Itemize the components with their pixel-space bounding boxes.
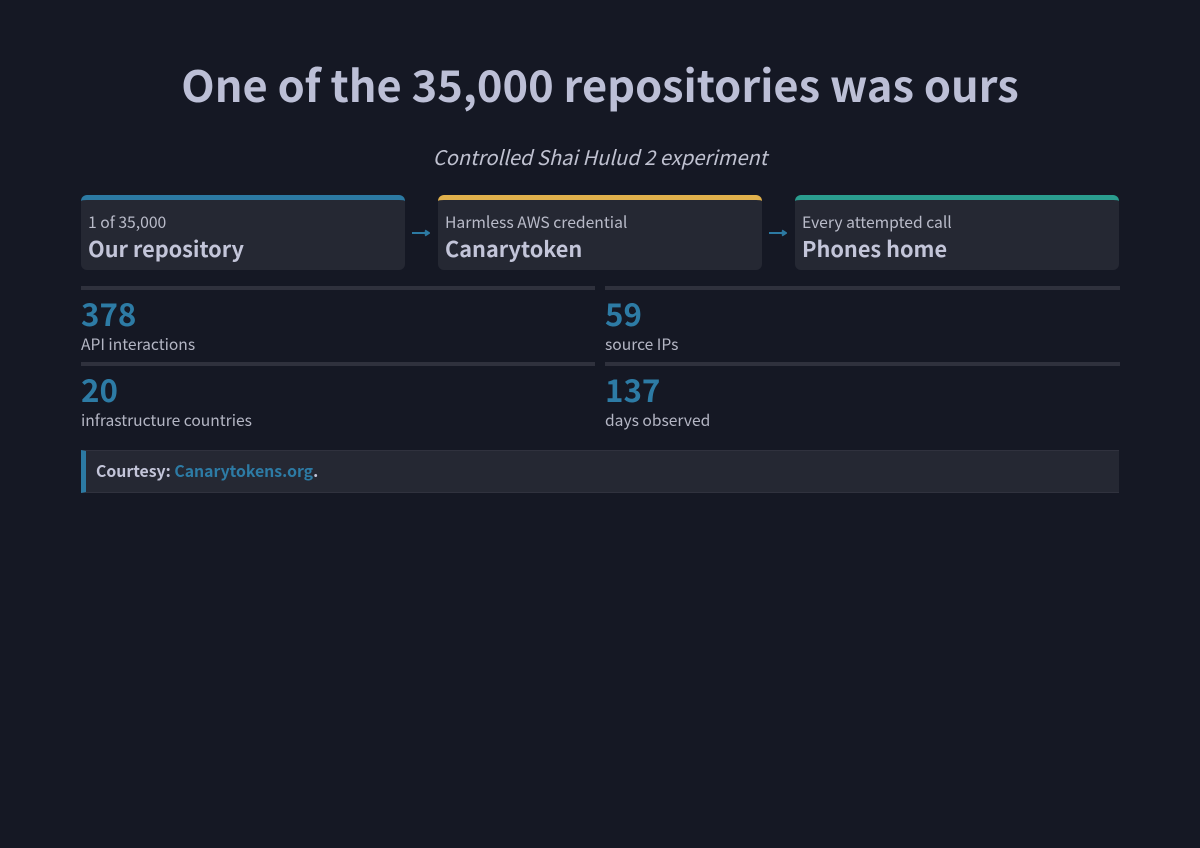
- card: canarytoken: Harmless AWS credential: [445, 210, 627, 233]
- card: our repository: Our repository: [88, 233, 244, 264]
- stat: API interactions: [81, 286, 595, 360]
- stat: source IPs: [605, 286, 1120, 360]
- callout: courtesy: Courtesy: Canarytokens.org.: [96, 459, 318, 482]
- stat: API interactions: API interactions: [81, 333, 195, 355]
- card: canarytoken: [438, 195, 762, 270]
- stat: infrastructure countries: infrastructure countries: [81, 409, 252, 431]
- arrow: repository to canarytoken: [412, 230, 430, 236]
- stat: days observed: [605, 362, 1120, 436]
- card: phones home: Every attempted call: [802, 210, 952, 233]
- subtitle: Controlled Shai Hulud 2 experiment: [433, 142, 767, 171]
- card: our repository: 1 of 35,000: [88, 210, 166, 233]
- stat: days observed: 137: [605, 367, 660, 412]
- arrow: canarytoken to phones home: [769, 230, 787, 236]
- card: phones home: Phones home: [802, 233, 947, 264]
- stat: infrastructure countries: 20: [81, 367, 118, 412]
- card: canarytoken: Canarytoken: [445, 233, 582, 264]
- callout: courtesy: [81, 450, 1119, 493]
- card: our repository: [81, 195, 405, 270]
- stat: source IPs: 59: [605, 291, 642, 336]
- stat: days observed: days observed: [605, 409, 710, 431]
- stat: source IPs: source IPs: [605, 333, 678, 355]
- title: One of the 35,000 repositories was ours: [181, 53, 1019, 115]
- stat: API interactions: 378: [81, 291, 136, 336]
- card: phones home: [795, 195, 1119, 270]
- stat: infrastructure countries: [81, 362, 595, 436]
